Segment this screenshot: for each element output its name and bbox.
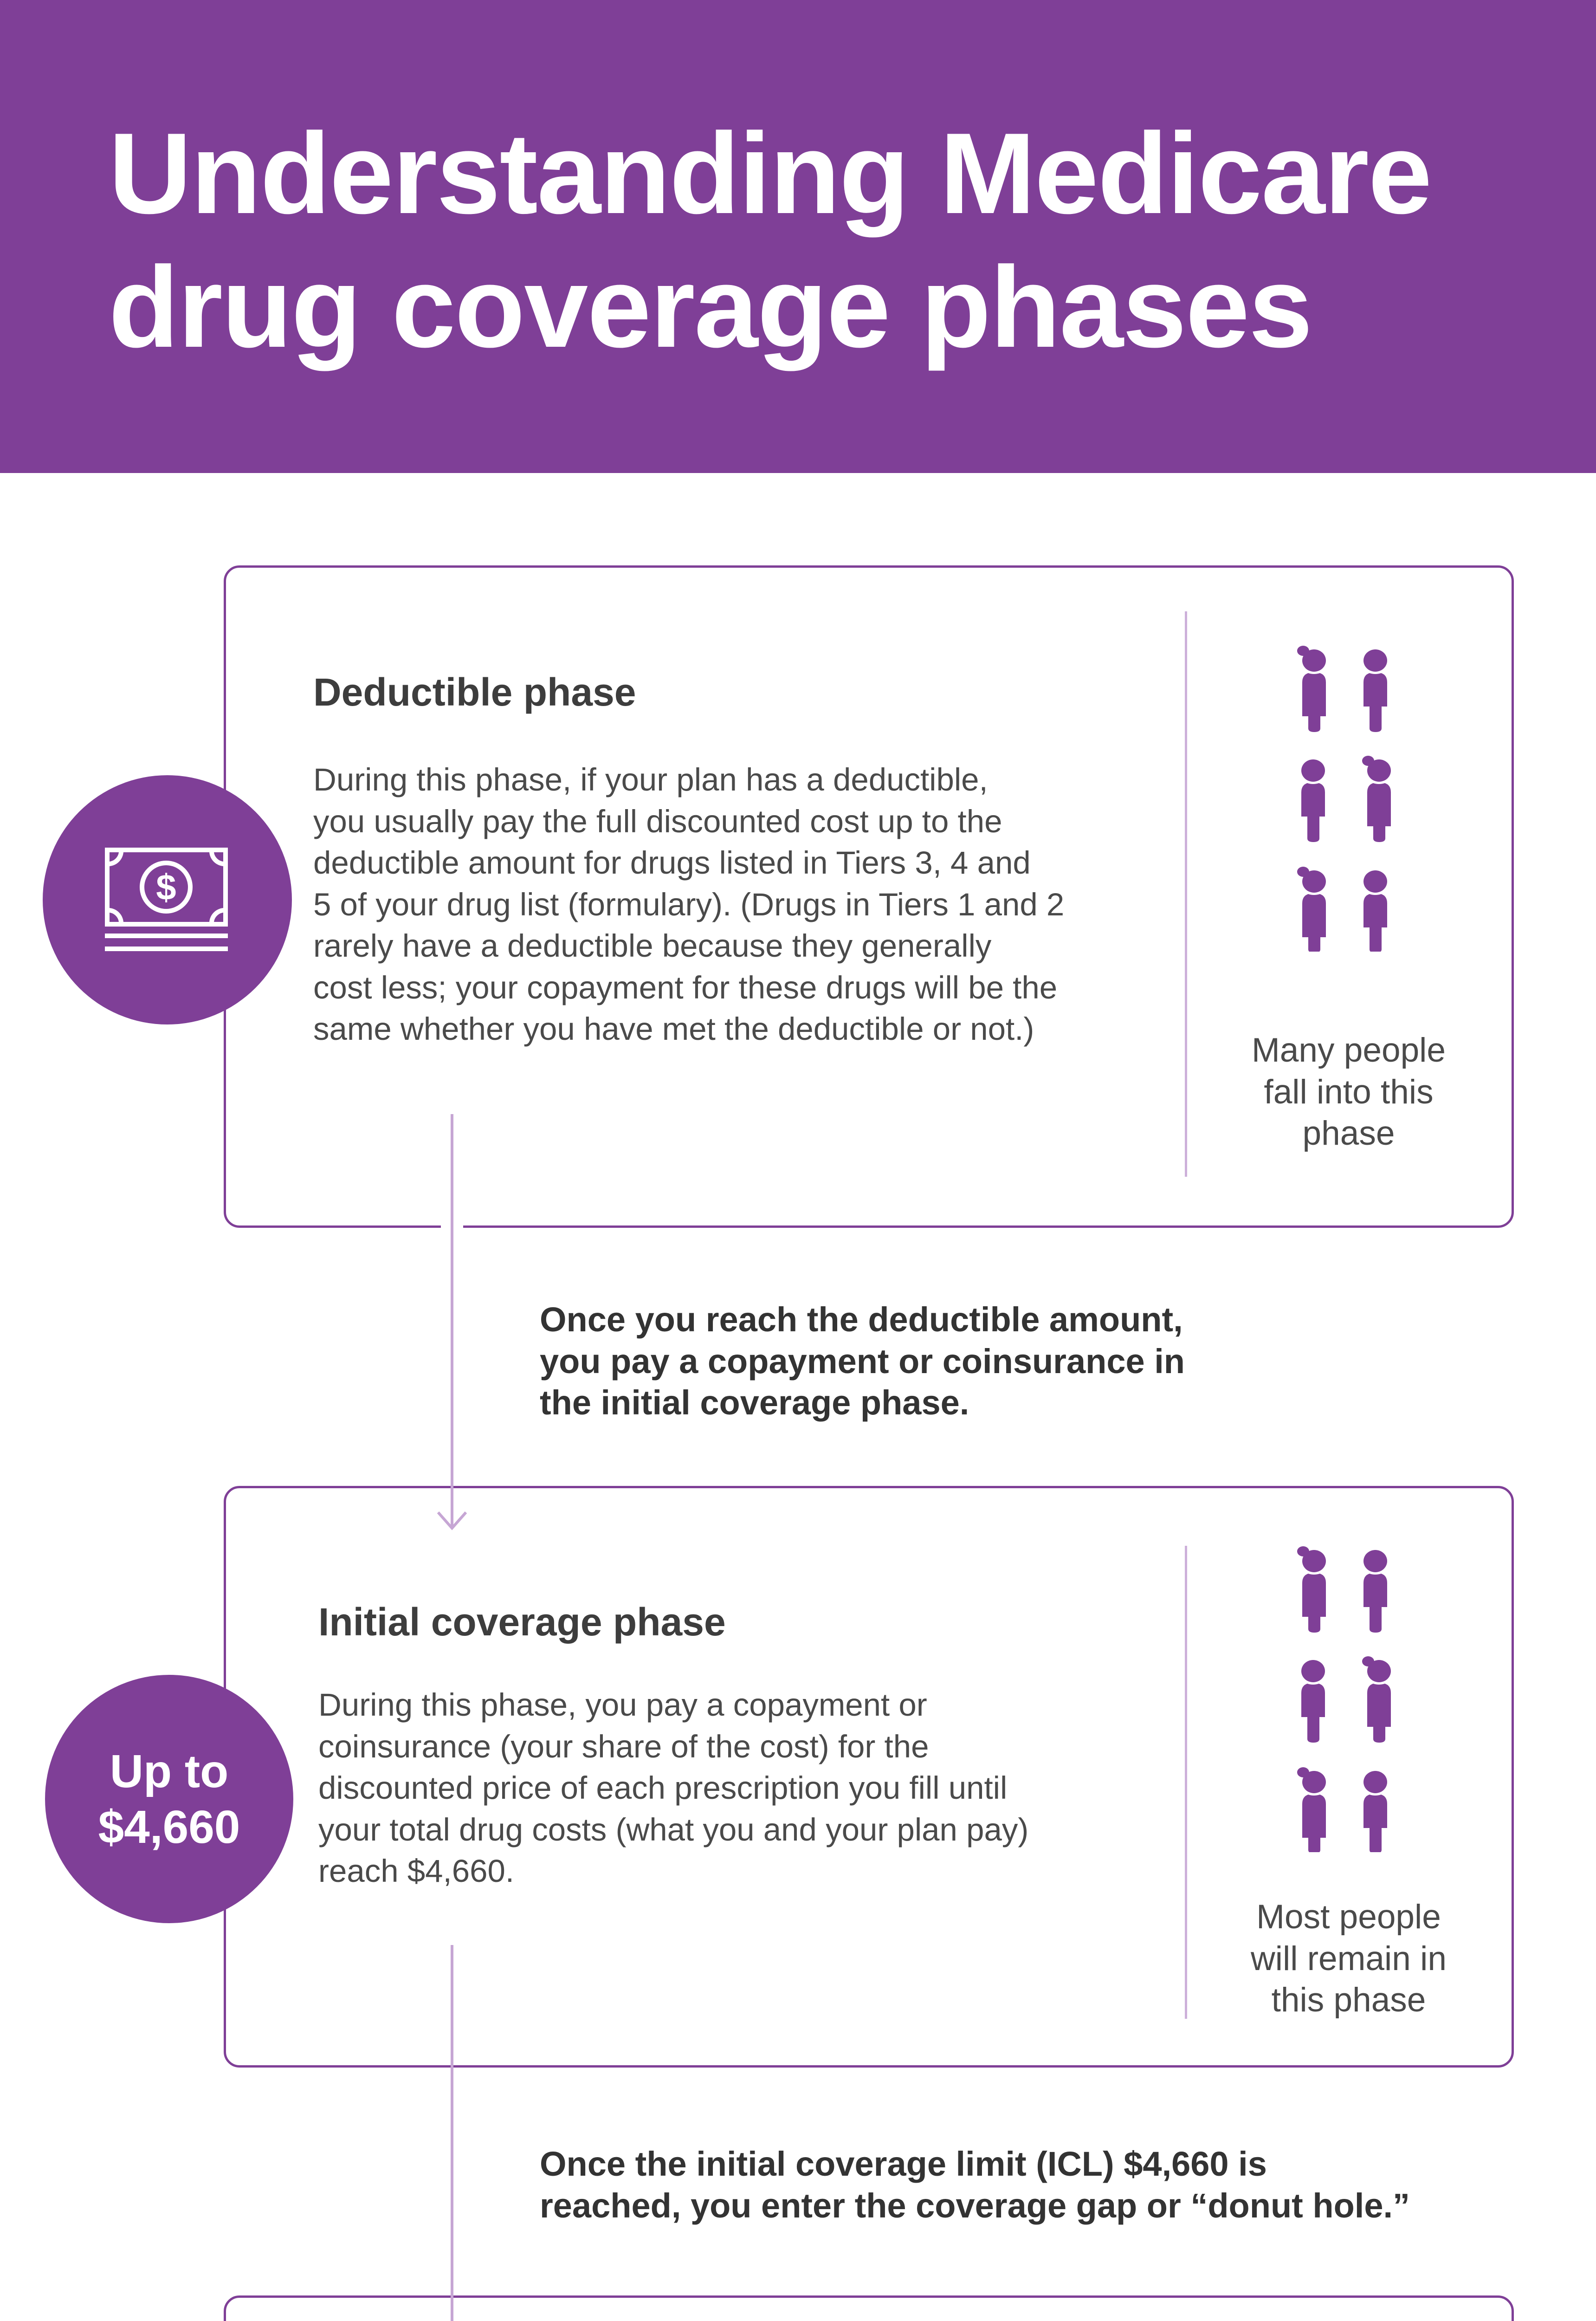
connector text 2: Once the initial coverage limit (ICL) $4,660 is (540, 2145, 1267, 2183)
connector text 2 (540, 2143, 1410, 2226)
text: deductible body (313, 759, 1064, 1050)
title (109, 106, 1431, 374)
circle: up to 4660: Up to (110, 1745, 228, 1797)
connector text 1: you pay a copayment or coinsurance in (540, 1342, 1185, 1381)
title: drug coverage phases (109, 242, 1312, 371)
connector text 2: reached, you enter the coverage gap or “donut hole.” (540, 2186, 1410, 2224)
circle: up to 4660 (45, 1675, 293, 1923)
text: initial body: discounted price of each prescription you fill until (318, 1770, 1007, 1806)
connector text 1 (540, 1299, 1185, 1423)
text: deductible body: deductible amount for drugs listed in Tiers 3, 4 and (313, 845, 1031, 881)
text: deductible body: you usually pay the full discounted cost up to the (313, 803, 1002, 839)
text: most people (1233, 1896, 1465, 2021)
text: initial body: During this phase, you pay a copayment or (318, 1687, 927, 1723)
icon: people many (1290, 645, 1392, 952)
text: many people (1233, 1030, 1465, 1154)
text: deductible body: 5 of your drug list (formulary). (Drugs in Tiers 1 and 2 (313, 887, 1064, 922)
icon: money circle: $ (156, 867, 176, 908)
text: initial body: reach $4,660. (318, 1853, 514, 1889)
arrow: deductible to initial (438, 1122, 466, 1528)
arrow: initial to gap (438, 1950, 466, 2321)
text: deductible body: rarely have a deductible because they generally (313, 928, 991, 964)
text: most people: will remain in (1251, 1939, 1447, 1977)
icon: people most (1290, 1546, 1392, 1852)
panel: initial coverage (224, 1486, 1514, 2068)
text: many people: fall into this (1264, 1073, 1434, 1110)
text: deductible body: cost less; your copayment for these drugs will be the (313, 969, 1057, 1005)
text: deductible body: During this phase, if your plan has a deductible, (313, 762, 988, 797)
panel: coverage gap (224, 2295, 1514, 2321)
connector text 1: the initial coverage phase. (540, 1383, 969, 1422)
heading: deductible: Deductible phase (313, 670, 636, 714)
text: most people: this phase (1272, 1981, 1426, 2019)
heading: initial: Initial coverage phase (318, 1600, 726, 1644)
text: initial body (318, 1684, 1028, 1892)
text: many people: Many people (1252, 1031, 1446, 1069)
panel: deductible phase (224, 565, 1514, 1228)
title: Understanding Medicare (109, 109, 1431, 238)
text: deductible body: same whether you have met the deductible or not.) (313, 1011, 1034, 1047)
circle: up to 4660: $4,660 (98, 1801, 240, 1853)
text: initial body: your total drug costs (what you and your plan pay) (318, 1811, 1028, 1848)
text: initial body: coinsurance (your share of the cost) for the (318, 1729, 929, 1764)
text: most people: Most people (1256, 1898, 1441, 1936)
icon: money circle (43, 775, 292, 1024)
connector text 1: Once you reach the deductible amount, (540, 1300, 1183, 1339)
header banner (0, 0, 1596, 473)
text: many people: phase (1303, 1115, 1395, 1152)
